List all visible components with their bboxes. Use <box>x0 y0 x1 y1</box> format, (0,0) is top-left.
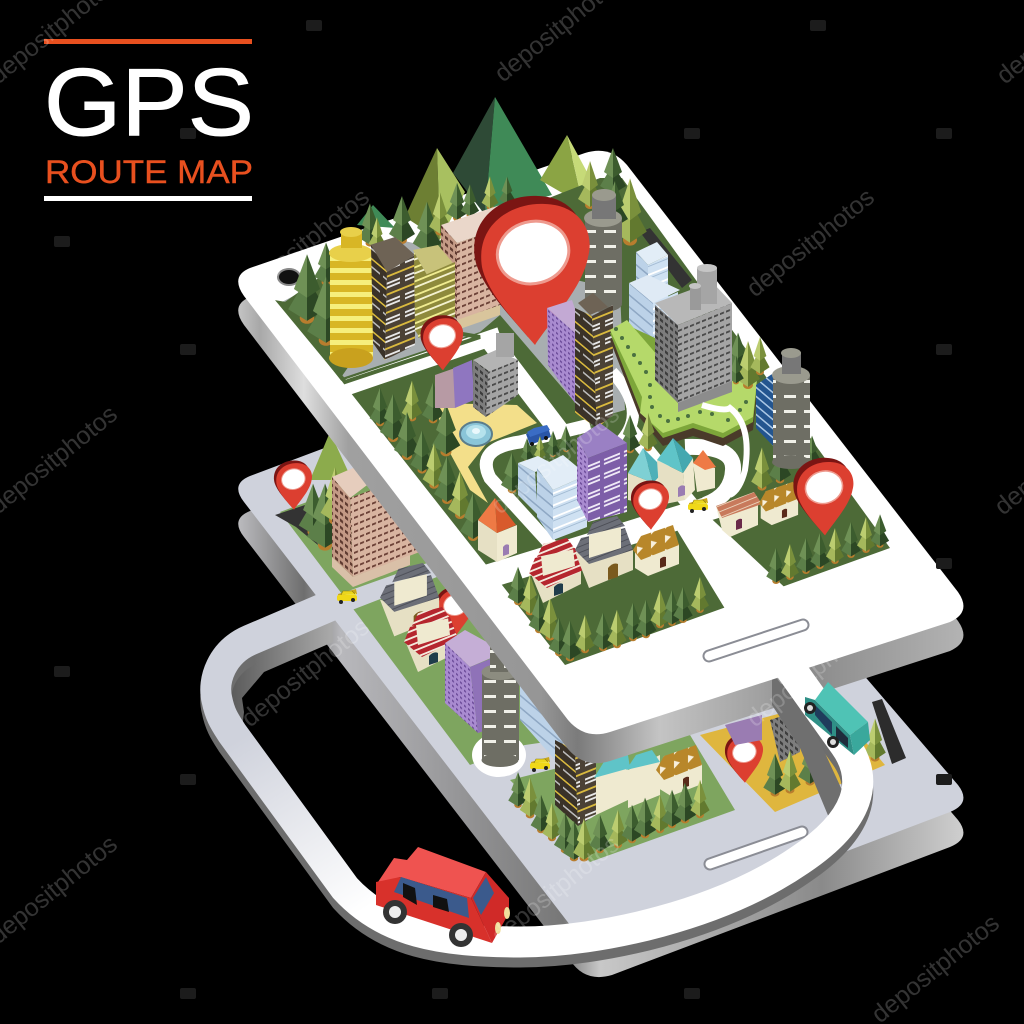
title block <box>44 39 254 201</box>
teal roof house, left <box>628 448 665 505</box>
top phone home button <box>709 625 803 656</box>
trees, center block <box>501 413 658 493</box>
trees, right block <box>766 514 889 584</box>
pink tower behind big pin <box>441 205 525 330</box>
brown tower, center <box>575 293 613 428</box>
gray small building with rooftop <box>473 333 518 417</box>
purple lilac tower <box>547 300 582 403</box>
straw roof house, lower screen <box>656 745 702 796</box>
gray round tower, right <box>772 348 810 469</box>
title block: GPS <box>44 49 254 156</box>
depositphotos watermarks: depositphotos <box>236 183 375 303</box>
trees, fountain block <box>370 381 486 541</box>
pin, yellow block <box>725 733 763 783</box>
park terrace <box>610 320 757 446</box>
gray roof house, top phone <box>575 516 633 588</box>
gray office building with rooftop towers <box>655 264 732 412</box>
depositphotos watermarks: depositphotos <box>741 183 880 303</box>
light blue tower, right <box>629 242 680 360</box>
trees, lower green block <box>508 772 710 862</box>
white roads on top screen <box>342 335 795 612</box>
orange roof house <box>478 498 517 562</box>
big red map pin <box>474 196 590 345</box>
top phone side wall <box>238 180 963 763</box>
light blue block, lower screen <box>520 685 565 760</box>
pin, right block <box>793 458 853 535</box>
teal roof house, right <box>657 438 695 505</box>
back mountain and trees, lower screen <box>299 432 352 551</box>
teal roof houses, lower screen <box>594 750 660 815</box>
purple tower, center <box>577 423 627 522</box>
small light blue tower <box>518 456 555 515</box>
gray round tower, lower screen <box>482 646 519 767</box>
bottom phone <box>238 350 963 977</box>
trees, lower green block, top phone <box>508 567 709 661</box>
orange roof house, right block <box>716 492 762 537</box>
fountain <box>460 422 492 446</box>
red roof house, top phone <box>529 538 583 603</box>
red roof house, lower screen <box>404 607 458 672</box>
yellow taxi, lower left <box>337 589 357 604</box>
pin, center <box>631 480 669 530</box>
purple tower, lower screen <box>445 630 505 733</box>
blue van <box>526 425 551 446</box>
curved path, top plaza <box>612 372 633 440</box>
navy tower <box>756 372 775 448</box>
small orange roof house <box>693 450 716 492</box>
pink small building <box>435 368 455 408</box>
route road wall <box>216 612 858 952</box>
brown tower <box>370 237 415 360</box>
depositphotos watermarks: depositphotos <box>486 400 625 520</box>
yellow round tower <box>329 227 373 368</box>
red car <box>376 847 510 947</box>
camera hole <box>278 269 300 285</box>
brown tower, lower screen <box>555 740 596 826</box>
yellow taxi, lower center <box>530 757 550 772</box>
purple small building <box>453 360 474 408</box>
lower-left pin on bottom phone <box>274 460 312 510</box>
purple small building, yellow block <box>725 715 762 745</box>
teal van <box>804 682 870 755</box>
straw roof house, right block <box>759 482 798 525</box>
mountains <box>357 97 587 240</box>
trees, yellow block <box>763 718 886 797</box>
depositphotos watermarks: depositphotos <box>236 613 375 733</box>
gray building, yellow block <box>770 710 800 762</box>
trees, back row <box>358 148 647 254</box>
title block: ROUTE MAP <box>45 154 253 190</box>
depositphotos watermarks: depositphotos <box>486 830 625 950</box>
depositphotos watermarks: depositphotos <box>741 613 880 733</box>
trees beside gray building <box>727 333 770 389</box>
entrance path, park <box>702 405 747 495</box>
trees, left of yellow tower <box>288 242 345 346</box>
light blue tower, center <box>537 455 587 540</box>
pink tower, lower screen <box>332 445 425 587</box>
bottom phone map <box>275 432 906 862</box>
park hedge dots <box>614 327 748 423</box>
bottom phone home button <box>710 832 802 864</box>
yellow fountain plaza <box>434 403 537 503</box>
dark slot, top screen edge <box>640 228 692 288</box>
yellow taxi, center right <box>688 498 708 513</box>
top phone screen <box>280 178 890 665</box>
gray round tower, back <box>584 189 622 312</box>
paved plaza, top left block <box>280 240 625 420</box>
red pin hidden behind houses <box>436 586 474 636</box>
gray roof house, lower screen <box>380 563 439 636</box>
straw roof house, top phone <box>633 525 679 576</box>
small pin <box>421 315 463 370</box>
olive tower <box>413 245 455 338</box>
top phone surface <box>238 151 963 734</box>
route road <box>216 605 858 942</box>
trees, right edge <box>751 436 820 491</box>
